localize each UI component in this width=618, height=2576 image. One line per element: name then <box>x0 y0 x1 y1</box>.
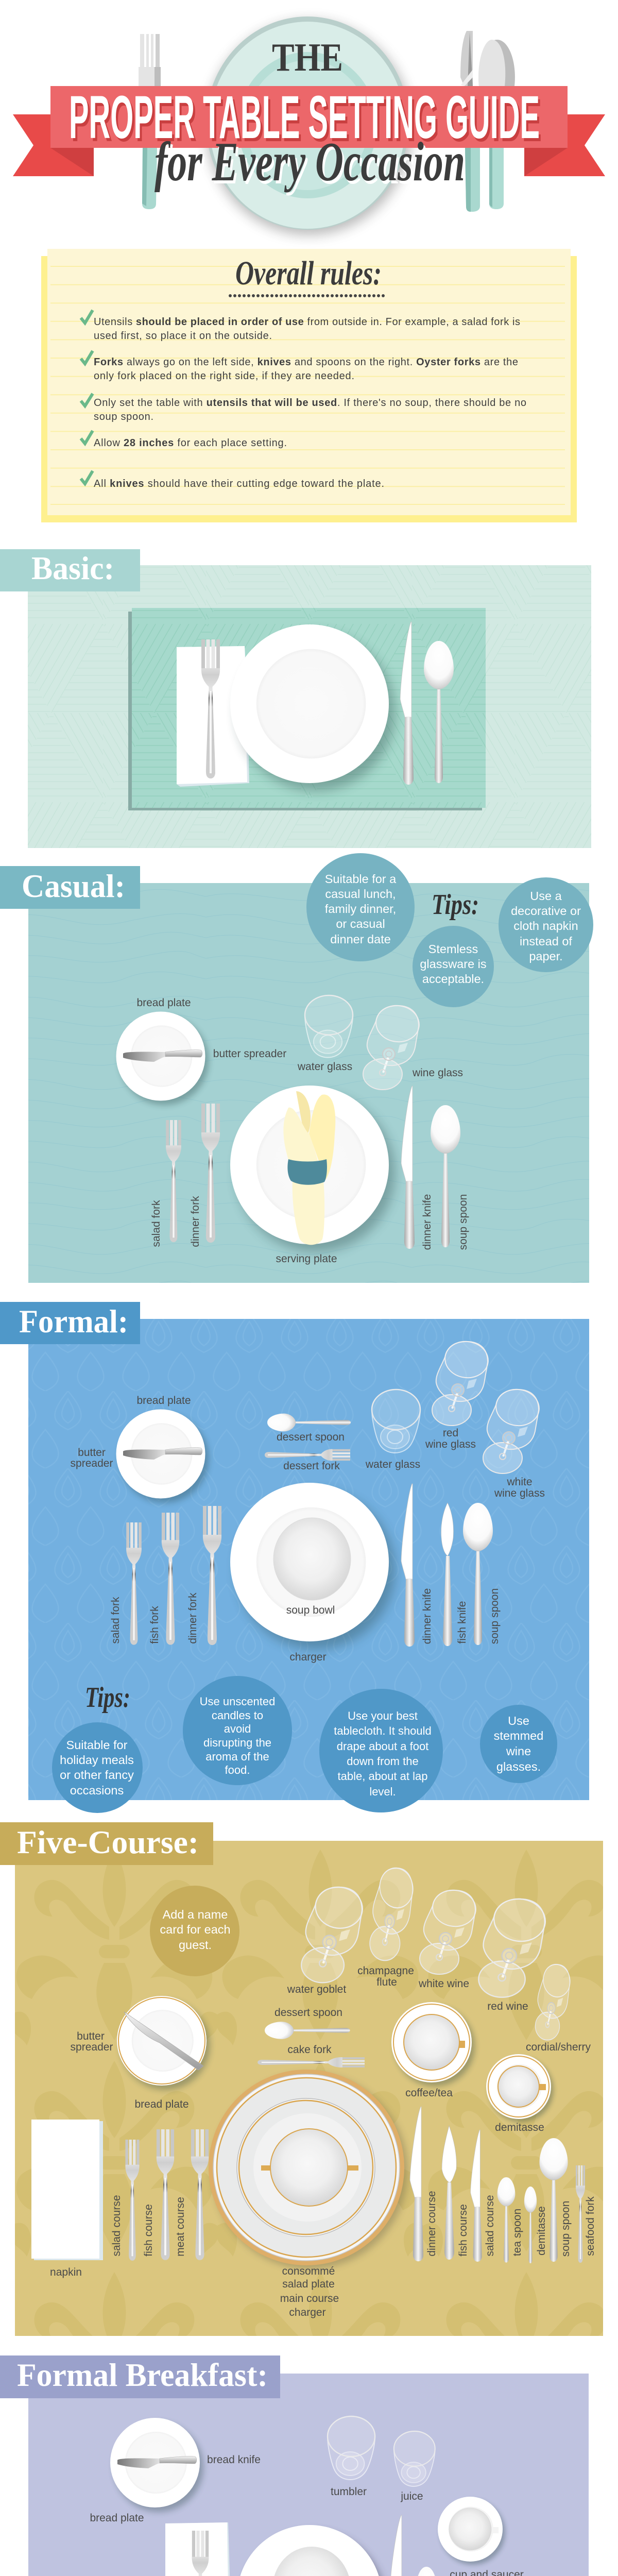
rule 4 <box>81 431 287 449</box>
rule 5: All knives should have their cutting edge toward the plate. <box>94 478 384 489</box>
red wine glass <box>478 1896 548 1997</box>
cup and saucer <box>438 2497 505 2565</box>
fish knife <box>442 2126 456 2260</box>
label: champagne flute: flute <box>376 1976 397 1988</box>
salad knife <box>471 2130 482 2262</box>
dinner knife <box>410 2107 423 2261</box>
luncheon fork <box>192 2531 209 2576</box>
icon: knife <box>400 622 414 785</box>
cereal bowl <box>272 2547 351 2576</box>
salad fork <box>166 1120 181 1242</box>
label: juice: juice <box>400 2490 423 2502</box>
label: bread plate: bread plate <box>134 2098 189 2110</box>
label: demitasse: demitasse <box>536 2206 547 2256</box>
tip bubble: napkin: decorative or <box>511 904 581 918</box>
tip bubble: suitable: casual lunch, <box>325 887 396 901</box>
fish fork <box>157 2129 174 2260</box>
cordial glass <box>535 1962 572 2040</box>
charger <box>230 1483 395 1649</box>
tea spoon <box>417 2567 436 2576</box>
salad fork <box>125 2140 140 2261</box>
header plate <box>206 16 412 235</box>
white wine glass <box>483 1386 541 1473</box>
label: champagne flute <box>357 1965 414 1988</box>
bread plate with bread knife <box>110 2418 203 2512</box>
napkin <box>165 2522 232 2576</box>
coffee cup and saucer <box>391 2002 475 2087</box>
label: water glass: water glass <box>365 1459 420 1470</box>
label: plate stack: main course <box>280 2293 339 2304</box>
label: dessert spoon: dessert spoon <box>274 2007 342 2019</box>
tip bubble: tablecloth <box>319 1689 443 1812</box>
tumbler <box>328 2416 375 2480</box>
label: dinner course: dinner course <box>426 2191 438 2257</box>
rule 2 <box>81 351 518 382</box>
icon: fork <box>201 639 220 778</box>
label: dinner fork: dinner fork <box>190 1196 201 1247</box>
label: dinner knife: dinner knife <box>421 1588 433 1644</box>
dessert spoon <box>265 2022 350 2039</box>
tip bubble: stemmed: wine <box>506 1744 531 1758</box>
label: napkin: napkin <box>50 2266 82 2278</box>
tip bubble: suitable: family dinner, <box>325 902 396 916</box>
tip bubble: suitable: or casual <box>336 917 385 930</box>
tip bubble: stemmed: stemmed <box>494 1729 543 1742</box>
label: cake fork: cake fork <box>287 2044 332 2056</box>
panel: formal breakfast <box>0 2355 589 2576</box>
heading: formal breakfast: Formal Breakfast: <box>17 2357 268 2393</box>
label: champagne flute: champagne <box>357 1965 414 1977</box>
label: dinner fork: dinner fork <box>187 1592 199 1644</box>
fish knife <box>441 1503 454 1646</box>
soup bowl <box>273 1518 351 1600</box>
salad fork <box>126 1522 142 1645</box>
rule 4: Allow 28 inches for each place setting. <box>94 437 287 449</box>
label: plate stack: consommé <box>282 2265 335 2277</box>
tip bubble: candles <box>183 1676 292 1785</box>
label: charger: charger <box>289 1651 327 1663</box>
label: bread plate: bread plate <box>136 1395 191 1406</box>
tip bubble: holiday <box>52 1722 143 1813</box>
tip bubble: candles: disrupting the <box>203 1736 271 1749</box>
seafood fork <box>576 2165 585 2263</box>
label: fish course: fish course <box>457 2204 469 2257</box>
champagne flute <box>370 1865 415 1960</box>
tip bubble: stemless: acceptable. <box>422 972 484 986</box>
demitasse spoon <box>524 2187 537 2263</box>
water glass <box>305 995 353 1058</box>
ribbon <box>13 86 605 176</box>
label: soup bowl: soup bowl <box>286 1604 335 1616</box>
label: white wine glass: white <box>506 1476 533 1488</box>
icon: header knife <box>460 31 480 212</box>
label: fish course: fish course <box>143 2204 154 2257</box>
meat fork <box>191 2129 209 2260</box>
label: soup spoon: soup spoon <box>489 1588 501 1644</box>
tip bubble: stemmed: glasses. <box>496 1760 541 1773</box>
tip bubble: candles: Use unscented <box>200 1695 275 1708</box>
label: plate stack <box>280 2265 339 2318</box>
label: salad fork: salad fork <box>110 1597 122 1644</box>
label: butter spreader <box>71 1447 113 1469</box>
tip bubble: suitable: Suitable for a <box>325 872 397 886</box>
panel: formal <box>0 1302 589 1813</box>
serving plate <box>230 1086 395 1252</box>
label: demitasse: demitasse <box>495 2122 544 2133</box>
tip bubble: stemless: Stemless <box>428 942 478 956</box>
label: soup spoon: soup spoon <box>457 1194 469 1250</box>
tip bubble: tablecloth: table, about at lap <box>338 1770 427 1783</box>
heading: casual <box>0 866 140 909</box>
tip bubble: candles: aroma of the <box>205 1750 269 1763</box>
header <box>13 16 605 235</box>
label: salad course: salad course <box>484 2195 496 2257</box>
demitasse cup and saucer <box>486 2054 554 2122</box>
tip bubble: stemless: glassware is <box>420 957 487 971</box>
label: butter spreader: spreader <box>71 2041 113 2053</box>
dessert fork <box>265 1449 350 1461</box>
label: red wine glass: red <box>443 1427 458 1439</box>
cake fork <box>258 2057 365 2067</box>
heading: overall rules: Overall rules: <box>235 255 382 292</box>
label: coffee/tea: coffee/tea <box>405 2087 453 2099</box>
tip bubble: name card: Add a name <box>163 1908 228 1921</box>
panel: basic <box>0 549 591 848</box>
label: white wine glass: wine glass <box>494 1487 545 1499</box>
wine glass <box>363 1003 421 1090</box>
tip bubble: napkin: paper. <box>529 950 563 963</box>
rule 5 <box>81 471 384 489</box>
title: for Every Occasion <box>154 131 467 196</box>
label: bread plate: bread plate <box>90 2512 144 2524</box>
tip bubble: tablecloth: drape about a foot <box>337 1740 428 1753</box>
white wine glass <box>420 1887 478 1974</box>
juice glass <box>394 2431 435 2486</box>
tip bubble: suitable: dinner date <box>330 933 391 946</box>
label: seafood fork: seafood fork <box>585 2196 596 2256</box>
fish fork <box>162 1513 179 1645</box>
tip bubble: candles: candles to <box>212 1709 263 1722</box>
water goblet <box>301 1884 365 1982</box>
title: for Every Occasion: for Every Occasion <box>157 134 467 196</box>
label: tumbler: tumbler <box>331 2486 367 2498</box>
icon: header fork <box>139 34 161 209</box>
label: plate stack: charger <box>289 2307 326 2318</box>
label: salad fork: salad fork <box>150 1200 162 1247</box>
tip bubble: holiday: or other fancy <box>60 1768 134 1782</box>
label: fish knife: fish knife <box>456 1601 468 1643</box>
dinner fork <box>201 1104 220 1243</box>
dinner fork <box>203 1506 221 1645</box>
tip bubble: stemless <box>413 926 494 1007</box>
heading: formal: Formal: <box>19 1303 128 1340</box>
red wine glass <box>432 1338 490 1426</box>
tip bubble: tablecloth: tablecloth. It should <box>334 1724 432 1737</box>
rule 2: only fork placed on the right side, if they are needed. <box>94 370 354 382</box>
folded napkin with ring <box>283 1091 335 1245</box>
soup spoon <box>463 1503 493 1645</box>
rule 1: used first, so place it on the outside. <box>94 330 272 342</box>
label: serving plate: serving plate <box>276 1253 337 1265</box>
bread plate with butter spreader <box>116 1012 209 1105</box>
label: plate stack: salad plate <box>282 2278 335 2290</box>
tip bubble: tablecloth: level. <box>369 1785 396 1798</box>
bread plate with knife <box>117 1996 210 2090</box>
rule 3 <box>81 394 526 422</box>
label: meat course: meat course <box>175 2197 186 2257</box>
tip bubble: stemmed <box>480 1705 557 1783</box>
label: dinner knife: dinner knife <box>421 1194 433 1250</box>
tip bubble: name card <box>150 1886 239 1976</box>
tip bubble: candles: avoid <box>224 1722 251 1735</box>
tip bubble: name card: guest. <box>179 1938 212 1952</box>
knife <box>390 2515 404 2576</box>
tip bubble: holiday: holiday meals <box>60 1753 134 1767</box>
rule 3: soup spoon. <box>94 411 153 422</box>
label: water glass: water glass <box>297 1061 352 1073</box>
panel: casual <box>0 853 593 1283</box>
title: for Every Occasion: for Every Occasion <box>154 131 465 193</box>
label: butter spreader: butter <box>78 1447 106 1459</box>
panel: five-course <box>0 1822 603 2336</box>
tip bubble: holiday: Suitable for <box>66 1738 128 1752</box>
tip bubble: name card: card for each <box>160 1923 231 1936</box>
label: red wine glass <box>425 1427 476 1450</box>
label: wine glass: wine glass <box>412 1067 463 1079</box>
tips heading: Tips: <box>432 889 479 921</box>
heading: five-course: Five-Course: <box>17 1824 199 1860</box>
tea spoon <box>497 2177 515 2263</box>
tip bubble: stemmed: Use <box>508 1714 529 1727</box>
icon: spoon <box>424 641 454 783</box>
label: bread plate: bread plate <box>136 997 191 1009</box>
label: butter spreader <box>71 2030 113 2053</box>
label: red wine: red wine <box>487 2001 528 2012</box>
label: white wine glass <box>494 1476 545 1499</box>
rule 3: Only set the table with utensils that will be used. If there's no soup, there should be no <box>94 397 526 409</box>
tip bubble: holiday: occasions <box>70 1784 124 1797</box>
label: butter spreader: spreader <box>71 1458 113 1469</box>
label: dessert fork: dessert fork <box>283 1460 340 1472</box>
dinner knife <box>401 1086 415 1249</box>
rule 1 <box>81 310 520 342</box>
label: tea spoon: tea spoon <box>511 2209 523 2256</box>
heading: casual: Casual: <box>22 868 125 904</box>
water glass <box>372 1389 420 1453</box>
label: fish fork: fish fork <box>149 1606 161 1644</box>
placemat <box>128 608 486 810</box>
tip bubble: tablecloth: down from the <box>347 1755 419 1768</box>
bread plate with butter spreader <box>116 1410 209 1503</box>
tip bubble: napkin <box>499 877 593 972</box>
dinner knife <box>401 1484 415 1647</box>
napkin <box>31 2120 103 2260</box>
dotted divider <box>230 294 385 297</box>
label: butter spreader: butter spreader <box>213 1048 286 1060</box>
label: dessert spoon: dessert spoon <box>277 1431 345 1443</box>
heading: basic <box>0 549 140 591</box>
soup spoon <box>431 1105 460 1247</box>
tip bubble: napkin: cloth napkin <box>513 919 578 933</box>
charger and plates <box>209 2070 408 2269</box>
label: water goblet: water goblet <box>287 1984 346 1995</box>
label: white wine: white wine <box>418 1978 469 1990</box>
tip bubble: candles: food. <box>225 1764 250 1776</box>
icon: header spoon <box>478 40 515 209</box>
soup spoon <box>539 2138 568 2262</box>
rule 2: Forks always go on the left side, knives and spoons on the right. Oyster forks are the <box>94 357 518 368</box>
label: red wine glass: wine glass <box>425 1438 476 1450</box>
panel: overall rules <box>41 249 577 522</box>
label: cordial/sherry: cordial/sherry <box>526 2041 591 2053</box>
heading: basic: Basic: <box>31 550 114 586</box>
tip bubble: tablecloth: Use your best <box>348 1709 418 1722</box>
label: soup spoon: soup spoon <box>560 2201 572 2257</box>
label: butter spreader: butter <box>77 2030 105 2042</box>
label: salad course: salad course <box>111 2195 123 2257</box>
tip bubble: napkin: Use a <box>530 889 562 903</box>
label: bread knife: bread knife <box>207 2454 261 2466</box>
rule 1: Utensils should be placed in order of use from outside in. For example, a salad fork is <box>94 316 520 328</box>
tip bubble: suitable <box>306 853 415 961</box>
title: THE: THE <box>272 35 343 79</box>
luncheon plate <box>237 2525 386 2576</box>
tip bubble: napkin: instead of <box>520 935 572 948</box>
napkin <box>177 646 249 787</box>
dinner plate <box>230 624 395 791</box>
tips heading: Tips: <box>85 1682 130 1714</box>
dessert spoon <box>267 1414 351 1431</box>
